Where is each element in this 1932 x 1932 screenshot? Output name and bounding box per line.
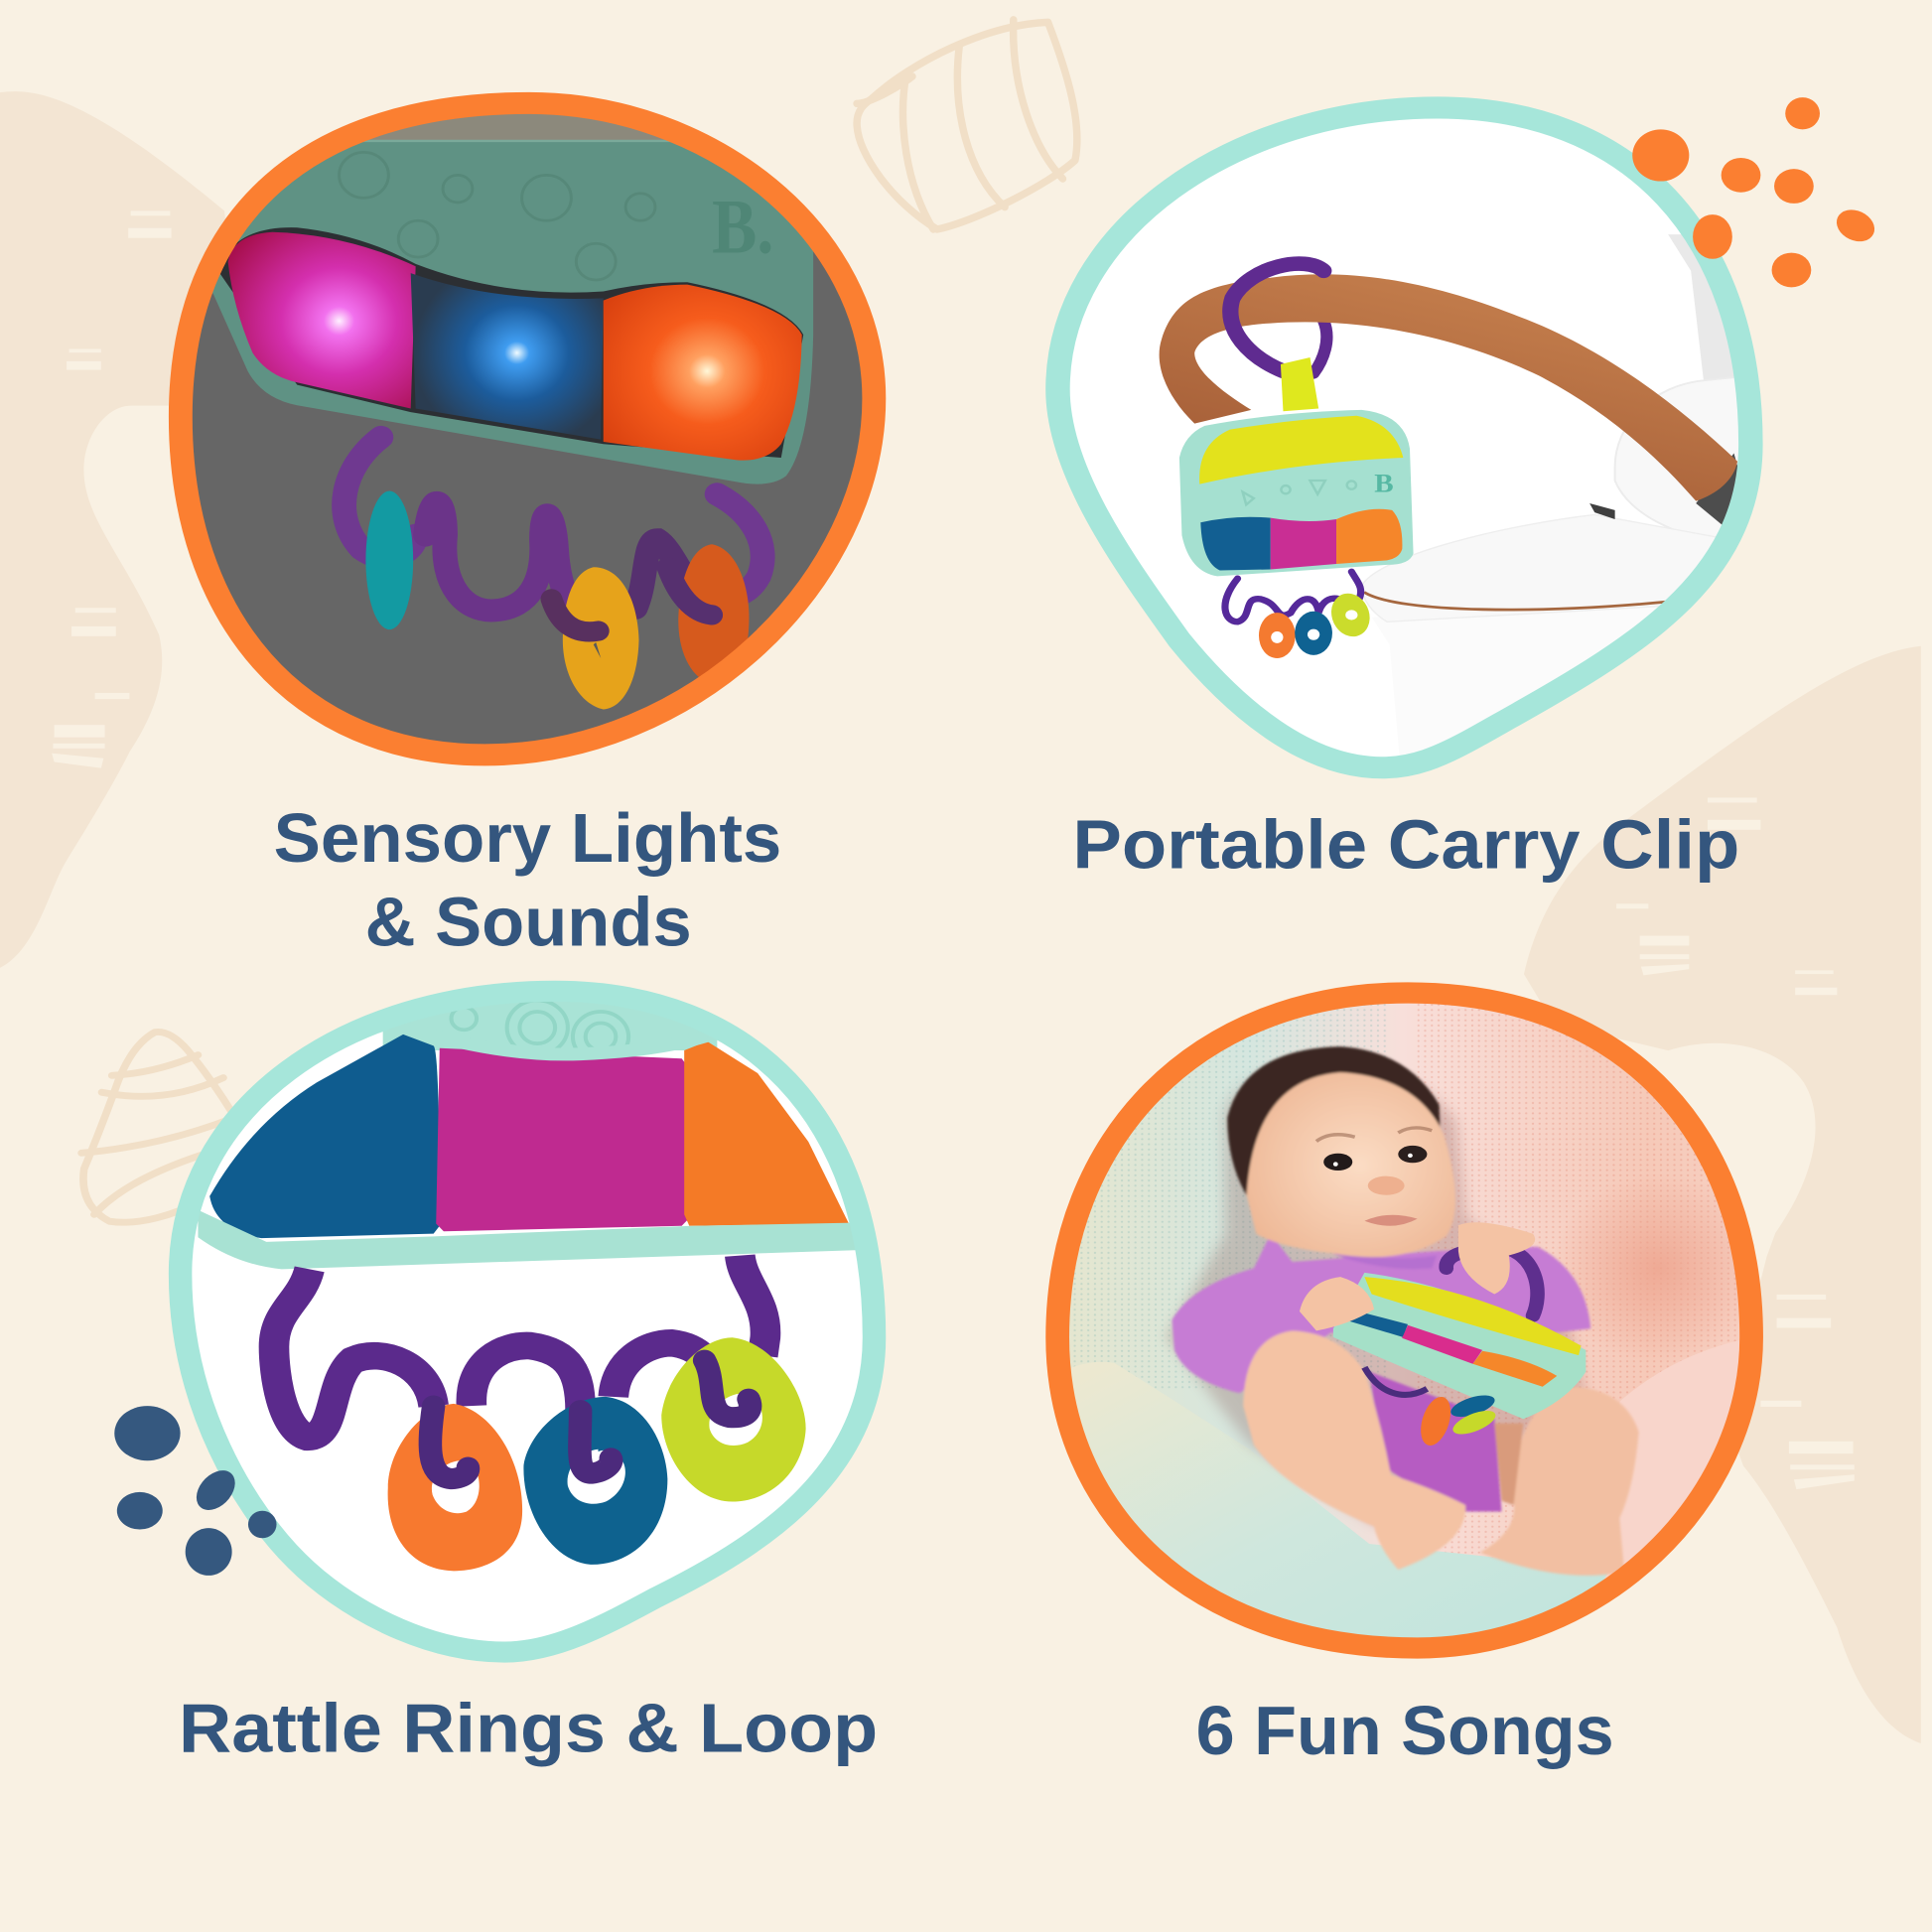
toy loops and rings (1225, 572, 1375, 658)
key divider band (462, 1040, 709, 1060)
orange light key (604, 285, 802, 461)
right leg (1480, 1387, 1639, 1576)
toy body: B (1374, 470, 1394, 498)
left leg (1243, 1330, 1465, 1570)
panel: rattle rings and loop (114, 981, 886, 1663)
ring: orange outline (1057, 993, 1751, 1648)
doodle: striped shape top (857, 20, 1077, 229)
ring: teal outline (1057, 107, 1750, 767)
heading: sensory lights and sounds (274, 799, 781, 961)
pink key (436, 1048, 693, 1231)
panel: sensory lights (169, 91, 886, 766)
photo: toy clipped to stroller (1070, 119, 1738, 757)
rings under toy (1364, 1367, 1499, 1449)
lower body (1369, 1372, 1502, 1512)
ring: yellow (551, 567, 639, 709)
toy body (179, 141, 813, 484)
purple handle (1447, 1248, 1538, 1315)
photo: toy close-up (192, 1001, 863, 1642)
purple clip loop (1230, 264, 1323, 371)
pink light key (228, 232, 416, 408)
panel: six fun songs (1045, 982, 1763, 1659)
toy held by baby (1333, 1273, 1586, 1419)
clip back strand (1313, 321, 1326, 373)
blue light key (411, 273, 604, 440)
blue key (209, 1035, 440, 1238)
upper hand (1458, 1222, 1535, 1295)
heading: six fun songs: 6 Fun Songs (1196, 1692, 1614, 1769)
brand mark: B. (712, 183, 773, 270)
ring: orange (388, 1404, 522, 1571)
face (1247, 1072, 1455, 1257)
cushion (1061, 1362, 1610, 1651)
panel: portable carry clip (1045, 96, 1763, 778)
eyes and facial features (1316, 1128, 1432, 1226)
decorative dots: orange (1632, 97, 1879, 287)
yellow tab (1281, 357, 1318, 411)
tray lip (198, 1210, 859, 1269)
heading: rattle rings and loop: Rattle Rings & Loop (179, 1690, 878, 1767)
heading: sensory lights and sounds: & Sounds (365, 884, 692, 961)
lower hand (1300, 1277, 1374, 1330)
background blob: right (1524, 646, 1921, 1743)
ring: blue (523, 1397, 667, 1565)
heading: portable carry clip: Portable Carry Clip (1072, 805, 1739, 883)
onesie top (1172, 1234, 1590, 1393)
hair (1227, 1046, 1442, 1199)
rattle loop (345, 437, 762, 628)
photo: toy lit up in the dark (193, 113, 862, 745)
orange key (684, 1041, 849, 1226)
collar (1326, 1247, 1437, 1269)
stroller seat (1362, 234, 1737, 622)
lower blanket (1604, 1340, 1739, 1579)
doodle: cone shape (81, 1032, 236, 1222)
photo: baby holding toy (1069, 1003, 1739, 1638)
toy body (1179, 410, 1414, 576)
shadow behind baby (1164, 1079, 1587, 1477)
ring: orange (667, 544, 749, 687)
baby (1172, 1046, 1639, 1576)
background blob: left (0, 91, 246, 968)
back strands (274, 1256, 765, 1437)
ring: orange outline (181, 103, 874, 755)
heading: sensory lights and sounds: Sensory Lights (274, 799, 781, 877)
decorative dots: blue (114, 1406, 277, 1576)
ring: teal outline (181, 991, 875, 1652)
ring: teal (365, 491, 413, 629)
ring: green (661, 1337, 806, 1502)
stroller bar (1160, 274, 1737, 501)
front strands (430, 1360, 751, 1479)
